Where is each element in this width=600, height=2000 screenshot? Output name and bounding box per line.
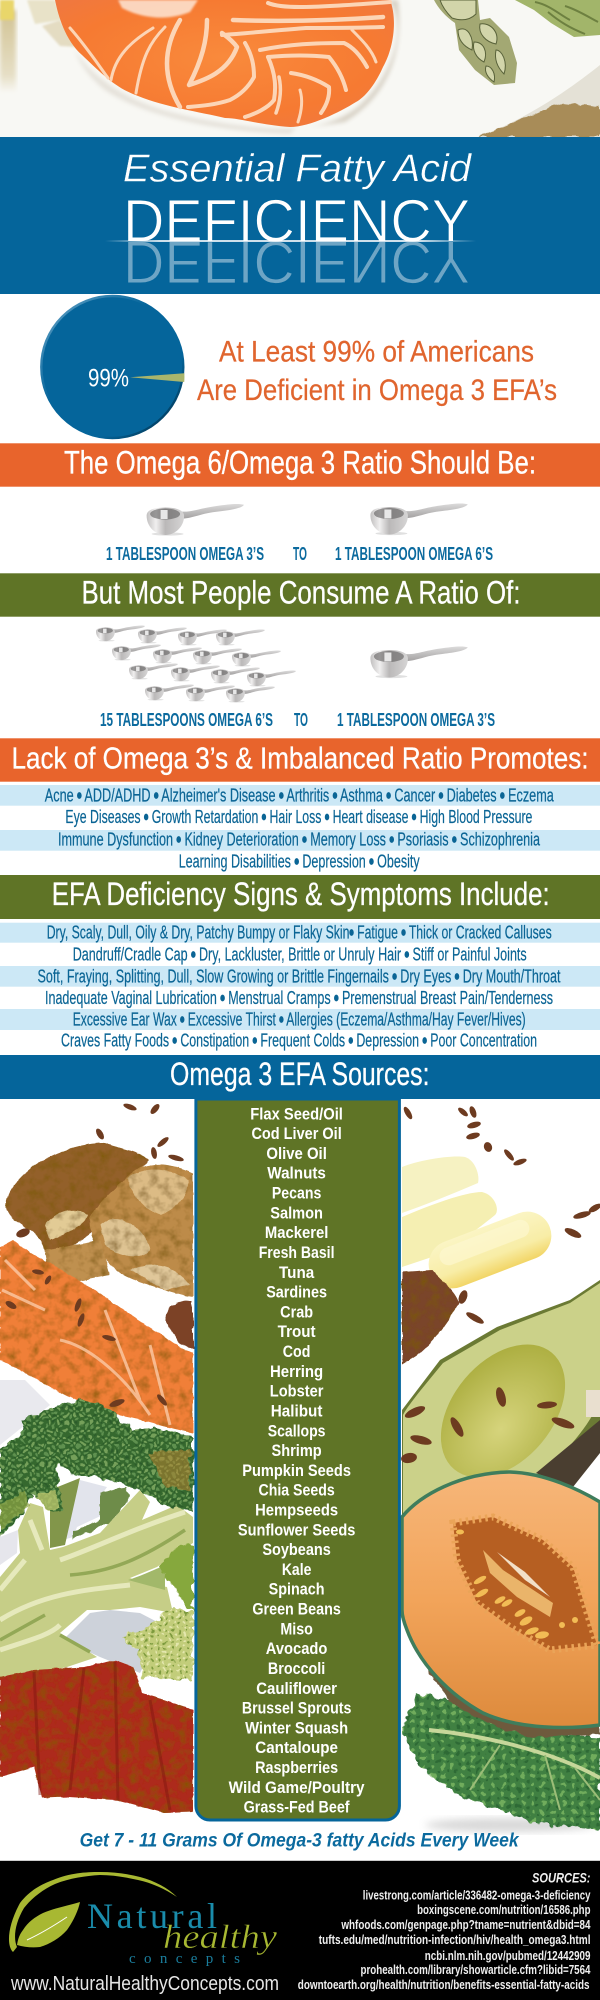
broccoli back floret: [73, 1487, 130, 1540]
typical ratio labels: 1 TABLESPOON OMEGA 3’S: [337, 710, 495, 730]
sources list: [298, 1870, 591, 1992]
list: signs and symptoms: Craves Fatty Foods • Constipation • Frequent Colds • Depression • Poor Concentration: [61, 1031, 537, 1051]
list of food sources: Avocado: [266, 1639, 327, 1658]
walnuts: [6, 1143, 193, 1297]
list: promoted conditions: Eye Diseases • Growth Retardation • Hair Loss • Heart disease • High Blood Pressure: [65, 807, 532, 827]
ideal ratio labels: 1 TABLESPOON OMEGA 3’S: [106, 544, 264, 564]
icon: tablespoon omega 3: [147, 504, 244, 536]
plate rim and cloth: [478, 65, 600, 137]
list of food sources: Sardines: [266, 1283, 327, 1302]
background shade behind broccoli: [0, 1380, 50, 1445]
list of food sources: [229, 1104, 365, 1817]
list of food sources: Miso: [280, 1619, 313, 1638]
list of food sources: Shrimp: [272, 1441, 322, 1460]
salmon piece: [0, 1240, 193, 1433]
typical ratio labels: 15 TABLESPOONS OMEGA 6’S: [100, 710, 273, 730]
list: signs and symptoms: Soft, Fraying, Splitting, Dull, Slow Growing or Brittle Fingernails • Dry Eyes • Dry Mouth/Throat: [38, 967, 560, 987]
list of food sources: Cod Liver Oil: [251, 1124, 342, 1143]
list of food sources: Grass-Fed Beef: [244, 1798, 350, 1817]
list: signs and symptoms: Dandruff/Cradle Cap • Dry, Lackluster, Brittle or Unruly Hair • Stiff or Painful Joints: [73, 945, 527, 965]
list of food sources: Sunflower Seeds: [238, 1520, 355, 1539]
broccoli florets: [0, 1400, 193, 1680]
photo: salmon on a plate: [0, 0, 600, 137]
heading: sources: Omega 3 EFA Sources:: [170, 1056, 430, 1092]
pie chart: 99 percent: 99%: [88, 365, 129, 393]
panel: omega 3 sources list: [196, 1099, 399, 1820]
callout: weekly omega 3 intake: Get 7 - 11 Grams Of Omega-3 fatty Acids Every Week: [80, 1831, 520, 1852]
list: promoted conditions: Immune Dysfunction • Kidney Deterioration • Memory Loss • Psoriasis • Schizophrenia: [58, 830, 541, 850]
photo collage: left foods: [0, 1102, 193, 1813]
list of food sources: Tuna: [279, 1263, 315, 1282]
callout: 99 percent of Americans: [197, 336, 557, 407]
photo collage: right foods: [400, 1105, 600, 1832]
title word: DEFICIENCY: DEFICIENCY: [123, 188, 470, 255]
list of food sources: Crab: [280, 1302, 313, 1321]
pie chart: 99 percent: [41, 296, 184, 438]
list of food sources: Cauliflower: [256, 1679, 337, 1698]
ideal ratio labels: TO: [293, 544, 307, 564]
list of food sources: Brussel Sprouts: [242, 1699, 351, 1718]
list of food sources: Soybeans: [262, 1540, 331, 1559]
list of food sources: Hempseeds: [255, 1500, 338, 1520]
flax pile right: [402, 1270, 459, 1364]
list of food sources: Spinach: [269, 1580, 325, 1599]
list of food sources: Flax Seed/Oil: [250, 1104, 343, 1123]
list of food sources: Scallops: [268, 1421, 326, 1440]
asparagus spears: [434, 0, 517, 85]
melon seed cavity: [453, 1517, 597, 1650]
flax pile left: [165, 1301, 193, 1350]
list of food sources: Mackerel: [265, 1223, 328, 1242]
ideal ratio labels: 1 TABLESPOON OMEGA 6’S: [335, 544, 493, 564]
typical ratio labels: TO: [294, 710, 308, 730]
list of food sources: Lobster: [270, 1382, 324, 1401]
list: promoted conditions: [0, 785, 600, 871]
title line: Essential Fatty Acid: Essential Fatty Acid: [123, 148, 472, 191]
flax seeds right: [400, 1105, 600, 1464]
list of food sources: Trout: [278, 1322, 316, 1341]
broccoli gap: [63, 1610, 167, 1673]
broccoli stalk: [0, 1490, 193, 1677]
list of food sources: Cantaloupe: [255, 1738, 338, 1757]
title banner: [0, 137, 600, 296]
footer bar: [0, 1860, 600, 2000]
callout: 99 percent of Americans: At Least 99% of Americans: [219, 336, 534, 369]
tuna: [0, 1660, 193, 1813]
typical ratio labels: [100, 710, 495, 730]
kale: [402, 1693, 600, 1832]
list of food sources: Walnuts: [267, 1164, 326, 1183]
list of food sources: Pecans: [272, 1184, 321, 1202]
list of food sources: Chia Seeds: [258, 1481, 335, 1500]
ideal ratio labels: [106, 544, 493, 564]
title reflection: DEFICIENCY: [123, 229, 470, 296]
avocado: [402, 1280, 600, 1520]
list of food sources: Olive Oil: [266, 1144, 327, 1163]
logo: Natural Healthy Concepts: healthy: [163, 1919, 278, 1956]
list: promoted conditions: Learning Disabilities • Depression • Obesity: [179, 851, 420, 871]
list of food sources: Salmon: [270, 1203, 323, 1222]
logo: Natural Healthy Concepts: [9, 1872, 278, 1967]
logo: Natural Healthy Concepts: Natural: [87, 1896, 217, 1936]
logo: Natural Healthy Concepts: concepts: [129, 1951, 240, 1967]
list of food sources: Kale: [282, 1560, 311, 1579]
cantaloupe: [402, 1472, 600, 1737]
list of food sources: Green Beans: [252, 1600, 341, 1619]
salmon fillet: [55, 0, 394, 127]
list of food sources: Cod: [283, 1342, 310, 1361]
list of food sources: Raspberries: [255, 1758, 338, 1777]
supplement capsules: [402, 1157, 478, 1213]
icon group: fifteen tablespoons: [96, 626, 296, 702]
website address: www.NaturalHealthyConcepts.com: [10, 1973, 279, 1995]
list of food sources: Wild Game/Poultry: [229, 1778, 365, 1797]
list of food sources: Halibut: [271, 1402, 323, 1420]
list: signs and symptoms: [0, 922, 600, 1051]
list of food sources: Pumpkin Seeds: [242, 1461, 351, 1480]
list of food sources: Fresh Basil: [259, 1243, 334, 1262]
icon: one tablespoon omega 3: [370, 646, 468, 678]
heading: sources: [0, 1055, 600, 1099]
list of food sources: Winter Squash: [245, 1718, 348, 1737]
list of food sources: Broccoli: [268, 1659, 325, 1678]
list: promoted conditions: Acne • ADD/ADHD • Alzheimer's Disease • Arthritis • Asthma • Cancer • Diabetes • Eczema: [45, 786, 554, 806]
flax seeds left: [4, 1102, 184, 1409]
icon: tablespoon omega 6: [370, 503, 468, 535]
list of food sources: Herring: [270, 1362, 323, 1381]
